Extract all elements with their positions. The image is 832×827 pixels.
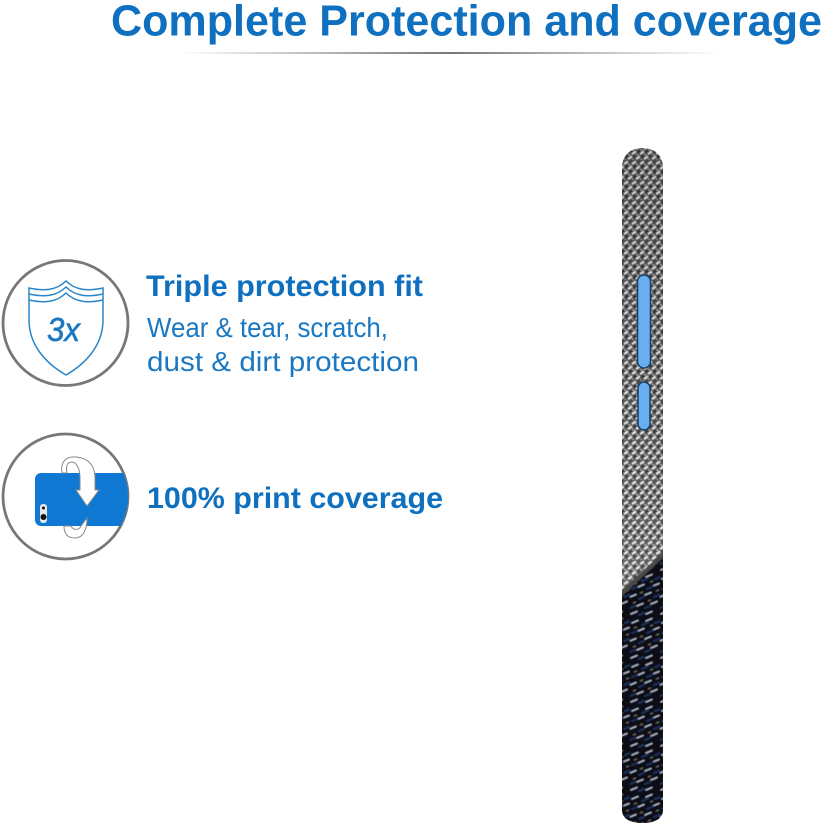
denim lower section	[622, 558, 663, 823]
phone case side view	[620, 146, 665, 826]
seam shadow	[622, 552, 663, 598]
volume button	[638, 275, 650, 368]
title underline	[180, 52, 720, 54]
text: wear and tear description	[147, 312, 419, 377]
text: wear and tear description: dust & dirt protection	[147, 346, 419, 377]
heading: 100% print coverage: 100% print coverage	[147, 482, 443, 515]
icon: triple protection shield: 3x	[47, 311, 81, 348]
power button	[638, 382, 650, 430]
heading: triple protection fit: Triple protection fit	[146, 270, 423, 303]
icon: full print coverage phone	[3, 434, 135, 559]
icon: triple protection shield	[3, 260, 128, 386]
text: wear and tear description: Wear & tear, scratch,	[147, 312, 388, 343]
